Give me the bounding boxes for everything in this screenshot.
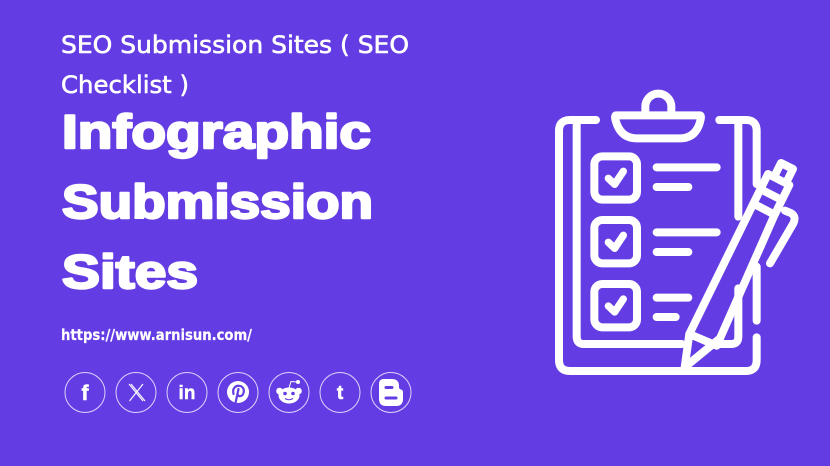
icon: reddit [269, 372, 309, 412]
checkbox 3 [594, 284, 637, 327]
clipboard inner sheet [577, 122, 738, 344]
icon: pinterest [218, 372, 258, 412]
icon: x [116, 372, 156, 412]
website url: https://www.arnisun.com/ [61, 326, 252, 344]
pen [685, 163, 795, 367]
title: Sites [62, 246, 198, 299]
subtitle: Checklist ) [61, 71, 189, 99]
subtitle [61, 31, 409, 99]
icon: facebook [65, 372, 105, 412]
icon: linkedin [167, 372, 207, 412]
title [62, 106, 373, 299]
icon: tumblr: t [337, 383, 344, 404]
title: Infographic [62, 106, 371, 159]
icon: tumblr [320, 372, 360, 412]
icon: clipboard checklist with pen [559, 94, 795, 371]
title: Submission [62, 176, 373, 229]
checkbox 2 [594, 220, 637, 263]
social icons row [65, 372, 411, 412]
clipboard outer frame [559, 120, 757, 371]
checkbox 1 [594, 156, 637, 200]
icon: blogger [371, 372, 411, 412]
subtitle: SEO Submission Sites ( SEO [61, 31, 409, 59]
icon: linkedin: in [179, 383, 195, 404]
clip [615, 94, 701, 138]
icon: facebook: f [82, 382, 90, 405]
checklist lines [657, 167, 717, 317]
